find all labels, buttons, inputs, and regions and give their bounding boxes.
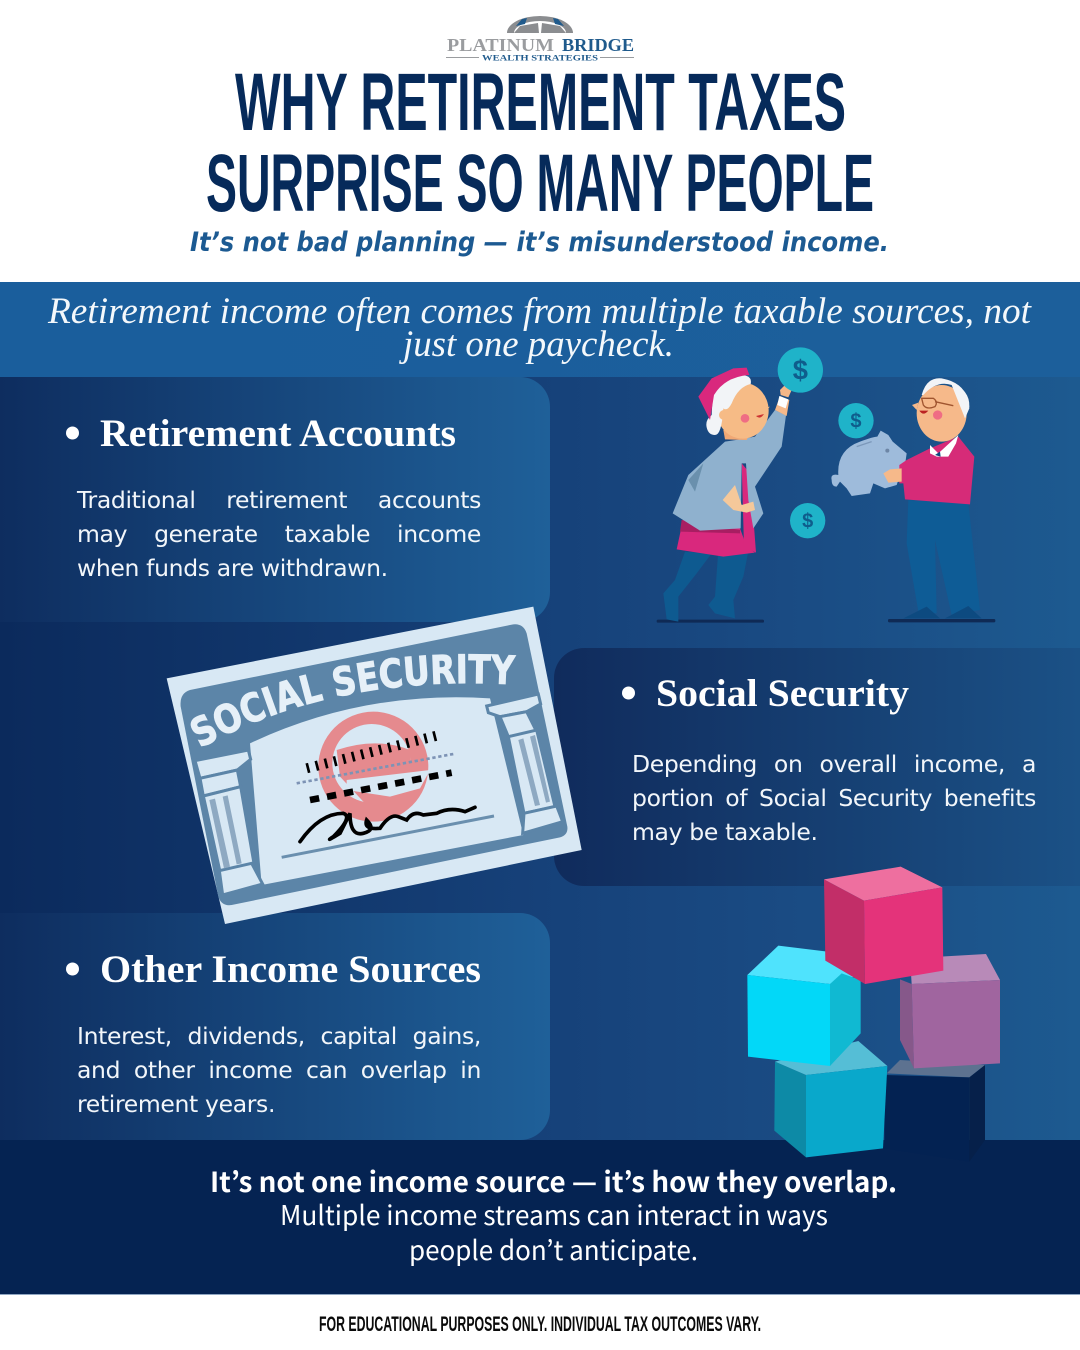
coin: lower: $	[802, 511, 813, 533]
takeaway text: Multiple income streams can interact in ways	[280, 1194, 828, 1233]
logo: Platinum Bridge Wealth Strategies: PLATINUM	[447, 35, 555, 55]
heading: other income sources: Other Income Sources	[100, 948, 481, 991]
panel: retirement accounts	[0, 377, 550, 622]
card blue frame	[181, 624, 567, 905]
card text: SOCIAL SECURITY: SOCIAL SECURITY	[190, 654, 516, 746]
left column	[195, 750, 263, 895]
text: other income body: retirement years.	[77, 1090, 275, 1118]
man figure	[883, 378, 982, 618]
intro statement: just one paycheck.	[399, 324, 674, 365]
number dashes and signature	[282, 735, 494, 857]
text: social security body: may be taxable.	[632, 818, 818, 846]
heading: retirement accounts: Retirement Accounts	[100, 412, 456, 455]
subtitle: It’s not bad planning — it’s misunderstood income.	[190, 227, 889, 258]
disclaimer: FOR EDUCATIONAL PURPOSES ONLY. INDIVIDUAL TAX OUTCOMES VARY.	[319, 1313, 761, 1336]
panel: main blue background	[0, 377, 1080, 1140]
text: other income body: Interest, dividends, capital gains,	[77, 1022, 481, 1050]
takeaway text: people don’t anticipate.	[409, 1229, 698, 1268]
card paper	[167, 607, 582, 924]
text: social security body: Depending on overall income, a	[632, 750, 1036, 778]
card centre field	[250, 697, 523, 885]
text: social security body: portion of Social Security benefits	[632, 784, 1036, 812]
coin: lower	[790, 503, 825, 538]
seal	[318, 712, 430, 822]
piggy bank	[831, 431, 907, 496]
illustration: social security card	[166, 606, 582, 924]
text: social security body	[632, 750, 1036, 846]
text: other income body: and other income can overlap in	[77, 1056, 481, 1084]
coin: middle	[838, 403, 874, 438]
title	[206, 57, 874, 229]
illustration: retirees saving coins in piggy bank	[657, 347, 995, 623]
text: retirement accounts body: when funds are withdrawn.	[77, 554, 388, 582]
logo: Platinum Bridge Wealth Strategies	[446, 16, 634, 63]
text: other income body	[77, 1022, 481, 1118]
block: navy	[884, 1060, 985, 1162]
woman figure	[663, 368, 792, 622]
block: pink	[824, 867, 943, 984]
block: purple	[900, 954, 1000, 1068]
coin: middle: $	[850, 411, 862, 433]
text: retirement accounts body: Traditional retirement accounts	[77, 486, 481, 514]
takeaway text	[210, 1161, 897, 1268]
heading: social security: Social Security	[656, 672, 910, 715]
intro statement: Retirement income often comes from multiple taxable sources, not	[47, 291, 1033, 332]
takeaway text: It’s not one income source — it’s how they overlap.	[210, 1161, 897, 1201]
logo: Platinum Bridge Wealth Strategies: BRIDGE	[562, 35, 634, 55]
intro statement	[47, 291, 1033, 365]
panel: multiple sources intro band	[0, 282, 1080, 377]
coin: top: $	[793, 354, 808, 385]
panel: social security	[554, 648, 1080, 886]
panel: bottom takeaway band	[0, 1140, 1080, 1295]
illustration: stacked colored blocks	[747, 867, 1000, 1162]
ground shadows	[657, 619, 995, 623]
block: teal lower	[774, 1041, 887, 1157]
text: retirement accounts body	[76, 486, 481, 582]
right column	[487, 694, 563, 833]
block: cyan	[747, 946, 861, 1066]
text: retirement accounts body: may generate taxable income	[77, 520, 481, 548]
coin: top	[778, 347, 823, 393]
logo: Platinum Bridge Wealth Strategies: WEALTH STRATEGIES	[482, 52, 598, 62]
panel: other income sources	[0, 913, 550, 1140]
